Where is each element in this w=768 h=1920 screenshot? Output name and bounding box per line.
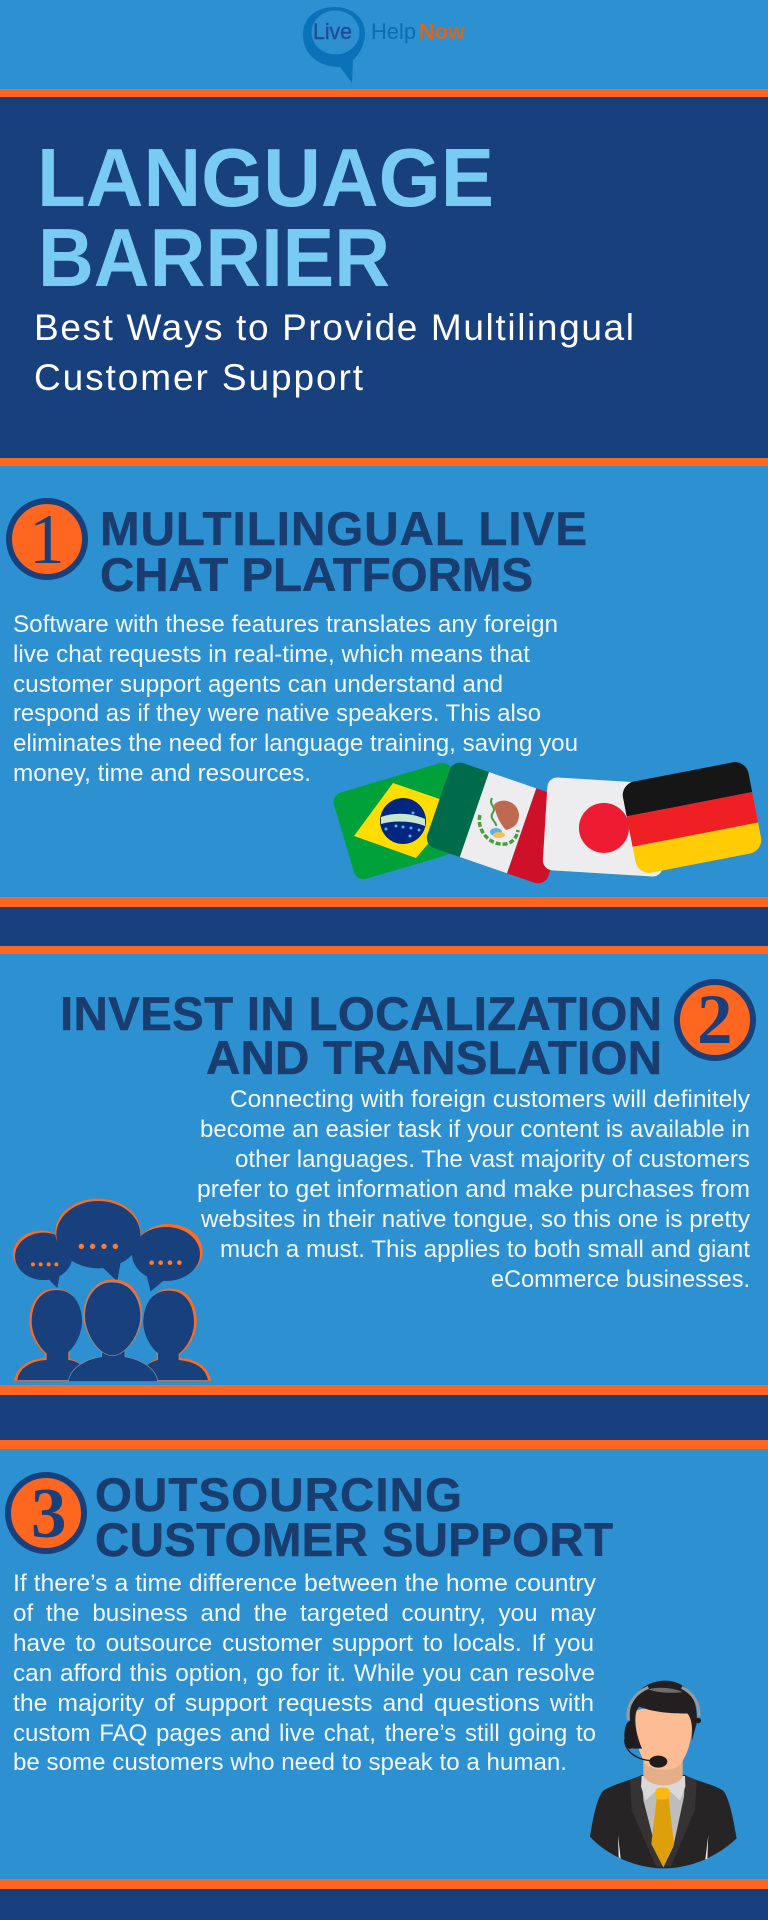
- agent: neck: [643, 1757, 683, 1785]
- panel: title banner: [0, 89, 768, 466]
- number badge 1: 1: [29, 501, 64, 579]
- agent: shirt: [642, 1776, 685, 1867]
- flag: Japan: [542, 777, 668, 877]
- agent: face: [634, 1708, 692, 1770]
- logo: LiveHelpNow: Now: [419, 19, 466, 44]
- body text 3: [13, 1570, 596, 1776]
- number badge 3: [8, 1475, 84, 1553]
- body text 3: of the business and the targeted country, you may: [13, 1600, 596, 1627]
- subtitle: Customer Support: [34, 357, 364, 398]
- agent: hair: [630, 1681, 697, 1749]
- flag: Mexico: [426, 762, 550, 884]
- heading 1: [100, 503, 587, 602]
- body text 1: [13, 611, 578, 787]
- agent: headset: [624, 1687, 701, 1768]
- body text 1: money, time and resources.: [13, 760, 311, 787]
- body text 2: other languages. The vast majority of customers: [235, 1146, 750, 1173]
- number badge 3: 3: [31, 1475, 66, 1553]
- subtitle: [34, 307, 634, 398]
- body text 3: can afford this option, go for it. While you can resolve: [13, 1660, 595, 1687]
- body text 2: Connecting with foreign customers will definitely: [230, 1086, 750, 1113]
- panel: header with logo: [0, 0, 768, 89]
- heading 3: CUSTOMER SUPPORT: [95, 1514, 613, 1567]
- heading 2: [60, 988, 662, 1085]
- panel: footer band: [0, 1879, 768, 1920]
- body text 1: eliminates the need for language training, saving you: [13, 730, 578, 757]
- agent: lapels: [630, 1775, 697, 1867]
- body text 2: prefer to get information and make purchases from: [197, 1176, 750, 1203]
- panel: section 2 localization and translation: [0, 954, 768, 1385]
- body text 1: Software with these features translates any foreign: [13, 611, 558, 638]
- panel: section 1 multilingual live chat: [6, 498, 762, 884]
- title: LANGUAGE: [37, 131, 494, 224]
- heading 1: CHAT PLATFORMS: [100, 549, 533, 602]
- speech bubble: middle: [55, 1199, 141, 1281]
- heading 1: MULTILINGUAL LIVE: [100, 503, 587, 556]
- body text 3: the majority of support requests and questions with: [13, 1690, 594, 1717]
- panel: divider band 1: [0, 897, 768, 954]
- body text 1: respond as if they were native speakers. This also: [13, 700, 541, 727]
- body text 2: [197, 1086, 750, 1293]
- number badge 1: [9, 501, 85, 579]
- body text 2: become an easier task if your content is available in: [200, 1116, 750, 1143]
- title: BARRIER: [38, 211, 390, 304]
- body text 2: websites in their native tongue, so this one is pretty: [200, 1206, 750, 1233]
- person: left: [14, 1289, 87, 1381]
- body text 3: be some customers who need to speak to a human.: [13, 1749, 567, 1776]
- flag: Brazil: [331, 760, 475, 882]
- heading 3: OUTSOURCING: [95, 1469, 462, 1522]
- panel: section 3 outsourcing customer support: [0, 1449, 768, 1879]
- logo: LiveHelpNow: Help: [371, 19, 416, 44]
- body text 3: have to outsource customer support to locals. If you: [13, 1630, 594, 1657]
- person: right: [140, 1289, 211, 1381]
- body text 3: If there’s a time difference between the home country: [13, 1570, 596, 1597]
- speech bubble: right: [132, 1224, 203, 1291]
- icon: support agent with headset: [590, 1681, 737, 1868]
- heading 3: [95, 1469, 613, 1567]
- body text 2: much a must. This applies to both small and giant: [220, 1236, 750, 1263]
- agent: tie: [651, 1788, 674, 1867]
- logo: LiveHelpNow: Live: [313, 19, 352, 44]
- subtitle: Best Ways to Provide Multilingual: [34, 307, 634, 348]
- body text 2: eCommerce businesses.: [491, 1266, 750, 1293]
- panel: divider band 2: [0, 1385, 768, 1449]
- body text 3: custom FAQ pages and live chat, there’s still going to: [13, 1720, 596, 1747]
- heading 2: INVEST IN LOCALIZATION: [60, 988, 662, 1041]
- flag: Germany: [620, 760, 764, 875]
- title: [37, 131, 494, 304]
- person: middle: [68, 1279, 158, 1382]
- icon: flags: [331, 760, 764, 886]
- number badge 2: [677, 981, 753, 1059]
- agent: jacket: [590, 1775, 737, 1868]
- body text 1: live chat requests in real-time, which means that: [13, 641, 530, 668]
- agent: jacket highlights: [618, 1835, 708, 1859]
- body text 1: customer support agents can understand and: [13, 671, 503, 698]
- number badge 2: 2: [697, 981, 732, 1059]
- agent: collar: [641, 1776, 685, 1801]
- heading 2: AND TRANSLATION: [206, 1032, 662, 1085]
- logo: LiveHelpNow: [303, 7, 466, 83]
- icon: people with speech bubbles: [13, 1199, 211, 1382]
- speech bubble: left: [13, 1231, 72, 1288]
